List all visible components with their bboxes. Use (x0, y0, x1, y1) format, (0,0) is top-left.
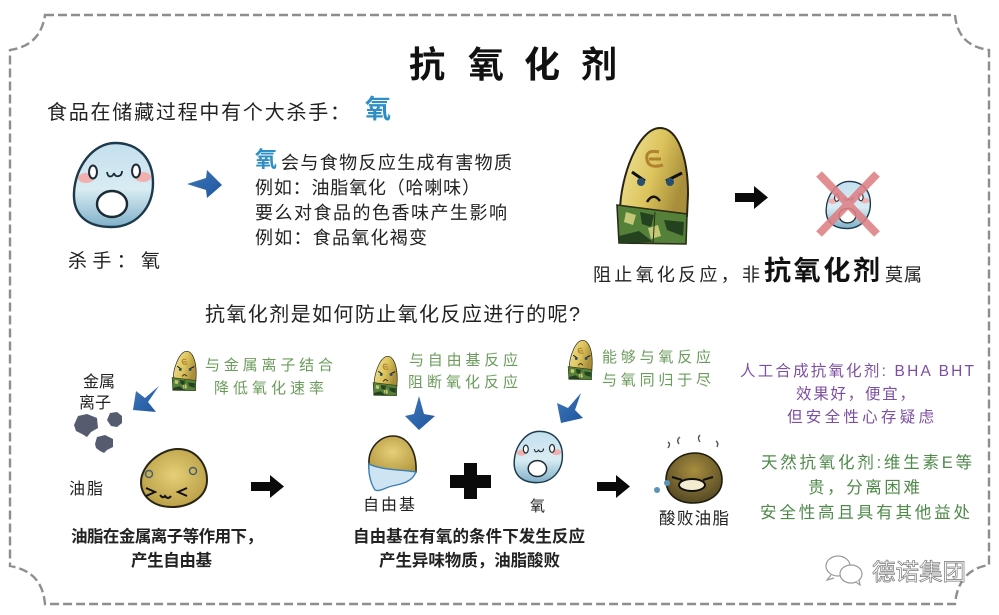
label: rancid oil: 酸败油脂 (659, 509, 729, 528)
label: metal ions: 离子 (79, 394, 111, 412)
text block: oxygen effects: 例如：油脂氧化（哈喇味） (255, 178, 480, 198)
label: killer oxygen: 杀手：氧 (68, 250, 160, 272)
icon: oxygen character (74, 143, 153, 227)
label: free radical: 自由基 (363, 496, 415, 514)
green note: block free radicals: 阻断氧化反应 (408, 373, 518, 391)
panel: antioxidant stops oxidation (593, 128, 922, 286)
arrow: black (251, 475, 284, 498)
caption: free radical formation (71, 526, 263, 570)
icon: small soldier (172, 351, 196, 391)
text block: oxygen effects: 要么对食品的色香味产生影响 (255, 203, 507, 223)
arrow: blue down-left (133, 386, 159, 412)
panel: oxygen killer (68, 143, 512, 272)
caption: free radical formation: 油脂在金属离子等作用下， (71, 526, 263, 546)
title: 化 (524, 44, 560, 85)
watermark name: 德诺集团 (872, 559, 966, 585)
caption: rancidity: 自由基在有氧的条件下发生反应 (353, 526, 585, 546)
text block: oxygen effects (255, 147, 512, 248)
watermark (826, 556, 966, 585)
panel: metal ions step (69, 351, 333, 570)
green note: react with oxygen: 能够与氧反应 (602, 348, 711, 366)
icon: plus sign (450, 463, 491, 499)
arrow: black (597, 475, 630, 498)
caption: rancidity (353, 526, 585, 570)
icon: free radical character (369, 436, 416, 491)
title (409, 44, 617, 85)
text block: natural antioxidants (760, 453, 972, 522)
icon: small soldier (373, 356, 397, 396)
text block: oxygen effects: 会与食物反应生成有害物质 (281, 153, 512, 173)
icon: oil character (141, 449, 207, 507)
text block: synthetic antioxidants: 但安全性心存疑虑 (787, 408, 934, 426)
text block: oxygen effects: 例如：食品氧化褐变 (255, 228, 427, 248)
arrow: blue right (187, 170, 222, 198)
caption: only antioxidants: 抗氧化剂 (764, 256, 880, 286)
icon: metal ions (74, 412, 122, 453)
label: oil: 油脂 (69, 480, 103, 498)
label: metal ions: 金属 (83, 373, 115, 391)
label: metal ions (79, 373, 115, 412)
green note: block free radicals: 与自由基反应 (409, 351, 518, 369)
green note: bind metal ions (205, 357, 333, 397)
arrow: black (735, 186, 768, 209)
text block: synthetic antioxidants: 人工合成抗氧化剂: BHA BHT (740, 362, 975, 380)
text block: synthetic antioxidants (740, 362, 975, 426)
green note: bind metal ions: 与金属离子结合 (205, 357, 333, 374)
caption: only antioxidants (593, 256, 922, 286)
panel: free radical reaction (353, 340, 729, 570)
heading: oxygen the killer (47, 94, 391, 124)
icon: oxygen character (514, 431, 562, 483)
caption: free radical formation: 产生自由基 (131, 550, 212, 570)
arrow: blue down-left (557, 393, 583, 423)
heading: oxygen the killer: 氧 (365, 94, 391, 124)
green note: block free radicals (408, 351, 518, 391)
title: 剂 (581, 44, 617, 85)
green note: react with oxygen: 与氧同归于尽 (602, 372, 711, 389)
text block: natural antioxidants: 安全性高且具有其他益处 (760, 503, 970, 522)
heading: oxygen the killer: 食品在储藏过程中有个大杀手： (47, 101, 350, 124)
label: oxygen: 氧 (530, 498, 545, 515)
green note: bind metal ions: 降低氧化速率 (214, 380, 324, 397)
arrow: blue down (405, 396, 435, 430)
title: 抗 (409, 44, 445, 85)
text block: natural antioxidants: 贵，分离困难 (808, 478, 920, 497)
icon: crossed-out oxygen (819, 174, 877, 234)
caption: rancidity: 产生异味物质，油脂酸败 (379, 550, 560, 570)
title: 氧 (468, 44, 504, 85)
caption: only antioxidants: 莫属 (885, 265, 922, 285)
icon: rancid oil character (654, 435, 722, 503)
icon: soldier bean (617, 128, 688, 244)
green note: react with oxygen (602, 348, 711, 389)
text block: natural antioxidants: 天然抗氧化剂:维生素E等 (761, 453, 972, 472)
subheading: how antioxidants work: 抗氧化剂是如何防止氧化反应进行的呢? (205, 303, 580, 326)
text block: oxygen effects: 氧 (255, 147, 277, 172)
icon: small soldier (568, 340, 592, 380)
caption: only antioxidants: 阻止氧化反应，非 (593, 265, 760, 285)
text block: synthetic antioxidants: 效果好，便宜， (796, 385, 915, 403)
icon: chat bubbles (826, 556, 862, 585)
